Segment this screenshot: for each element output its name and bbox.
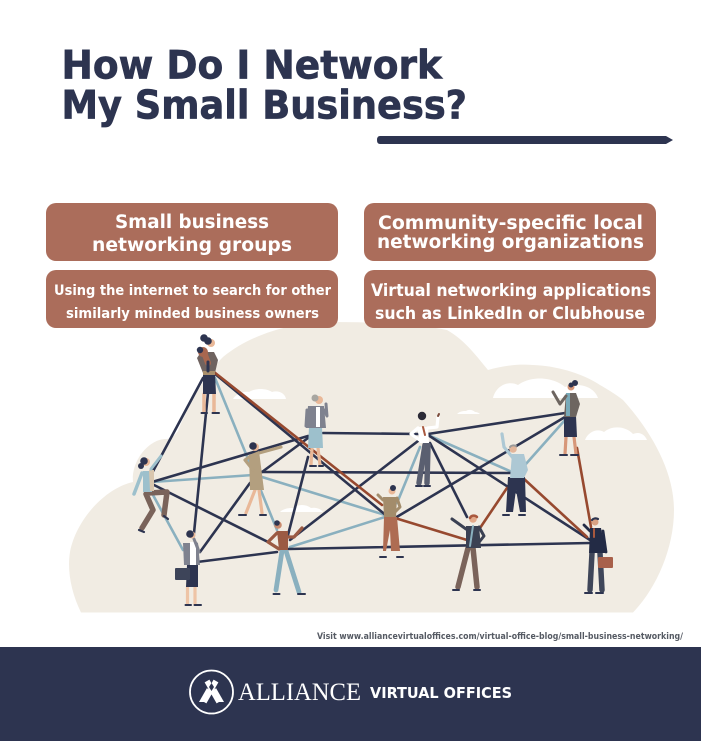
logo wordmark: VIRTUAL OFFICES xyxy=(370,684,512,702)
panel: virtual networking applications: Virtual networking applications xyxy=(371,281,651,300)
logo wordmark xyxy=(238,679,512,706)
person: woman in brown trousers xyxy=(378,485,403,557)
person: grey haired woman xyxy=(306,394,327,466)
panel: virtual networking applications: such as LinkedIn or Clubhouse xyxy=(375,304,645,323)
title: How Do I Network xyxy=(62,42,444,88)
person: woman holding child xyxy=(197,334,219,413)
panel: using the internet: Using the internet to search for other xyxy=(54,283,332,299)
panel: community-specific local networking organizations: Community-specific local xyxy=(378,213,643,234)
panel: small business networking groups xyxy=(46,203,338,261)
person: woman with briefcase xyxy=(175,530,201,605)
logo icon xyxy=(190,670,233,714)
person: man in white shirt xyxy=(411,412,439,486)
panel: community-specific local networking organizations: networking organizations xyxy=(377,232,644,253)
person: climbing woman xyxy=(134,456,168,532)
person: woman in navy skirt xyxy=(553,380,580,455)
person: man in grey jacket xyxy=(452,515,484,590)
person: man in brown sweater xyxy=(268,520,305,594)
panel: small business networking groups: Small business xyxy=(115,212,269,233)
white clouds xyxy=(233,378,647,512)
panel: using the internet xyxy=(46,270,338,328)
title xyxy=(62,42,467,128)
panel: small business networking groups: networking groups xyxy=(92,235,292,256)
cloud background xyxy=(69,322,674,612)
person: woman in tan dress xyxy=(239,442,281,515)
panel: virtual networking applications xyxy=(364,270,656,328)
network lines xyxy=(151,372,591,562)
logo wordmark: ALLIANCE xyxy=(238,679,361,706)
title: My Small Business? xyxy=(62,82,467,128)
panel: using the internet: similarly minded business owners xyxy=(66,306,319,322)
panel: community-specific local networking organizations xyxy=(364,203,656,261)
person: older man in blue sweater xyxy=(502,434,528,515)
person: man in suit with briefcase xyxy=(584,518,613,593)
title underline arrow xyxy=(377,136,673,144)
footer band xyxy=(0,647,701,741)
